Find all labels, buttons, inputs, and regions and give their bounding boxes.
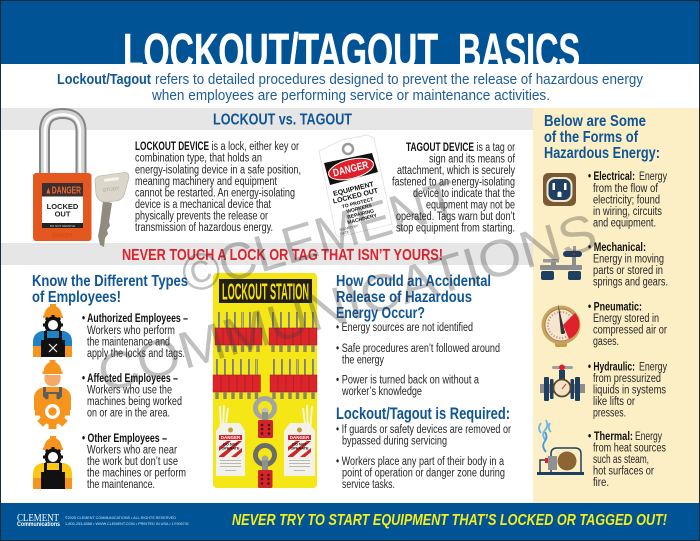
text: mechanical: parts or stored in	[593, 265, 663, 277]
text: mechanical: springs and gears.	[593, 276, 668, 288]
station sign	[219, 278, 312, 304]
list: when required: • If guards or safety devices are removed or	[336, 424, 511, 436]
white strip below title	[0, 64, 700, 69]
heading: how could an accidental release occur: How Could an Accidental	[336, 273, 491, 290]
illustration: lockout station board	[213, 273, 317, 488]
text: affected employees: Workers who use the	[87, 384, 172, 396]
text: electrical: from the flow of	[593, 183, 659, 195]
text: affected employees: • Affected Employees –	[82, 373, 178, 385]
list: when required: bypassed during servicing	[342, 436, 447, 448]
logo: clement communications	[17, 512, 61, 528]
text: LOCKOUT STATION	[222, 278, 309, 304]
text: authorized employees: the maintenance and	[87, 336, 170, 348]
text: affected employees: machines being worked	[87, 396, 182, 408]
text: other employees: the work but don’t use	[87, 456, 178, 468]
heading: how could an accidental release occur: Release of Hazardous	[336, 289, 472, 306]
footer band	[0, 503, 700, 540]
panel: lockout vs tagout heading band: LOCKOUT vs. TAGOUT	[213, 112, 352, 128]
padlock rows	[213, 312, 317, 399]
text: tagout device: operated. Tags warn but don’t	[396, 211, 516, 223]
icon: danger tag	[319, 135, 392, 237]
text: mechanical: • Mechanical:	[588, 242, 646, 254]
text: lockout device: energy-isolating device in a safe position,	[135, 164, 301, 176]
copyright: ©2025 CLEMENT COMMUNICATIONS • ALL RIGHTS RESERVED	[65, 516, 176, 520]
list: when required: service tasks.	[342, 479, 395, 491]
text: mechanical: Energy in moving	[593, 254, 664, 266]
heading: know the different types of employees: Know the Different Types	[32, 273, 188, 290]
text: authorized employees: apply the locks and tags.	[87, 348, 185, 360]
icon: danger tag: EQUIPMENT	[333, 181, 375, 198]
text: other employees: Workers who are near	[87, 444, 177, 456]
text: electrical: Energy	[639, 171, 667, 183]
icon: authorized employee	[33, 304, 72, 357]
text: lockout device: cannot be restarted. An energy-isolating	[135, 188, 295, 200]
copyright	[65, 516, 189, 526]
hasp one	[256, 398, 274, 438]
list: accidental release causes: worker’s knowledge	[341, 386, 422, 398]
text: hydraulic: Energy	[639, 362, 667, 374]
band: never touch warning: NEVER TOUCH A LOCK OR TAG THAT ISN’T YOURS!	[122, 247, 443, 264]
text: hydraulic: liquids in systems	[593, 384, 666, 396]
text: tagout device: attachment, which is securely	[397, 165, 515, 177]
text: pneumatic: compressed air or	[593, 324, 667, 336]
danger tag left: DO NOT	[223, 442, 239, 446]
text: thermal: such as steam,	[593, 454, 649, 466]
icon: danger tag: TO PROTECT	[341, 197, 374, 210]
text: thermal: from heat sources	[593, 442, 666, 454]
hasp two	[256, 446, 274, 488]
text: pneumatic	[588, 302, 667, 348]
text: lockout device: meaning machinery and equipment	[135, 176, 278, 188]
text: thermal: fire.	[593, 477, 609, 489]
text: affected employees: on or are in the area.	[87, 408, 170, 420]
danger tag left: DANGER	[221, 435, 241, 440]
header band	[0, 0, 700, 64]
panel: hazardous energy background	[533, 108, 699, 503]
title: LOCKOUT/TAGOUT	[123, 24, 438, 80]
text: affected employees	[82, 373, 182, 420]
text: tagout device: sign and its means of	[429, 154, 516, 166]
zip ties	[220, 405, 312, 432]
text: electrical: and equipment.	[593, 218, 656, 230]
heading: how could an accidental release occur: Energy Occur?	[336, 305, 425, 322]
text: authorized employees	[82, 313, 188, 360]
text: tagout device: fastened to an energy-isolating	[392, 176, 515, 188]
text: lockout device: physically prevents the release or	[135, 210, 268, 222]
text: mechanical	[588, 242, 668, 288]
text: tagout device: is a tag or	[476, 142, 515, 154]
intro text	[57, 71, 643, 104]
text: other employees: the machines or perform	[87, 468, 186, 480]
text: thermal	[588, 431, 666, 489]
danger tag left	[216, 423, 245, 476]
text: authorized employees: Workers who perform	[87, 325, 175, 337]
icon: danger tag: MACHINERY	[347, 213, 378, 226]
text: electrical: in wiring, circuits	[593, 206, 662, 218]
heading: how could an accidental release occur	[336, 273, 491, 322]
heading: forms of hazardous energy	[544, 113, 660, 162]
icon: orange padlock: DO NOT REMOVE	[50, 224, 75, 228]
heading: know the different types of employees	[32, 273, 188, 306]
text: hydraulic: presses.	[593, 408, 626, 420]
icon: thermal boiler	[537, 420, 584, 475]
copyright: 1-800-253-6368 • WWW.CLEMENT.COM • PRINTED IN USA • 1Y908741	[65, 522, 189, 526]
text: thermal: Energy	[635, 431, 662, 443]
text: pneumatic: Energy stored in	[593, 313, 659, 325]
text: electrical	[588, 171, 667, 230]
list: accidental release causes: • Safe procedures aren’t followed around	[336, 343, 500, 355]
text: electrical: electricity; found	[593, 194, 660, 206]
logo: clement communications: CLEMENT	[17, 512, 59, 524]
icon: pressure gauge	[542, 304, 580, 347]
danger tag right: DO NOT	[292, 442, 308, 446]
icon: danger tag: DATE	[340, 230, 350, 236]
band: never touch warning	[0, 243, 533, 265]
title: BASICS	[458, 24, 580, 80]
danger tag right	[284, 423, 315, 476]
danger tag left: OPERATE	[221, 446, 240, 450]
icon: danger tag: DANGER	[332, 159, 370, 179]
heading: forms of hazardous energy: Hazardous Energy:	[544, 145, 660, 162]
text: tagout device: equipment may not be	[426, 200, 515, 212]
icon: danger tag: WORKERS	[346, 203, 373, 215]
text: lockout device: transmission of hazardous energy.	[135, 222, 273, 234]
text: tagout device: stop equipment from starting.	[396, 222, 515, 234]
text: tagout device	[392, 142, 516, 234]
icon: affected employee	[34, 360, 71, 429]
text: lockout device: device is a mechanical device that	[135, 199, 272, 211]
text: hydraulic	[588, 362, 667, 420]
heading: forms of hazardous energy: of the Forms of	[544, 129, 639, 146]
text: authorized employees: • Authorized Employees –	[82, 313, 188, 325]
list: when required	[336, 424, 511, 491]
danger tag right: DANGER	[290, 435, 310, 440]
text: pneumatic: gases.	[593, 336, 619, 348]
panel: lockout vs tagout heading band	[0, 108, 533, 130]
icon: danger tag: SIGNED BY	[339, 224, 359, 232]
logo: clement communications: Communications	[17, 522, 61, 528]
text: other employees: the maintenance.	[87, 479, 155, 491]
icon: key: STUDY	[102, 186, 121, 194]
text: lockout device: LOCKOUT DEVICE	[135, 141, 209, 153]
text: hydraulic: from pressurized	[593, 373, 661, 385]
danger tag right: OPERATE	[290, 446, 309, 450]
icon: orange padlock: LOCKED	[47, 202, 79, 211]
icon: mechanical machinery	[540, 246, 582, 280]
list: accidental release causes: • Power is turned back on without a	[336, 374, 479, 386]
list: accidental release causes: • Energy sources are not identified	[336, 322, 473, 334]
icon: key	[95, 172, 129, 247]
text: pneumatic: • Pneumatic:	[588, 302, 642, 314]
text: thermal: hot surfaces or	[593, 466, 654, 478]
intro text: Lockout/Tagout	[57, 71, 151, 88]
list: when required: • Workers place any part of their body in a	[336, 456, 504, 468]
intro text: refers to detailed procedures designed to prevent the release of hazardous energy	[155, 71, 643, 88]
icon: orange padlock: OUT	[55, 210, 71, 218]
icon: hydraulic valve	[540, 364, 585, 401]
text: lockout device: is a lock, either key or	[212, 141, 299, 153]
list: accidental release causes: the energy	[342, 354, 384, 366]
text: hydraulic: • Hydraulic:	[588, 362, 635, 374]
icon: electrical outlet	[543, 173, 576, 206]
text: tagout device: device to indicate that the	[413, 188, 515, 200]
text: tagout device: TAGOUT DEVICE	[406, 142, 474, 154]
icon: orange padlock: ▲DANGER	[45, 186, 82, 196]
text: other employees: • Other Employees –	[82, 433, 167, 445]
list: accidental release causes	[336, 322, 500, 398]
heading: know the different types of employees: of Employees!	[32, 289, 121, 306]
heading: lockout/tagout is required: Lockout/Tagout is Required:	[336, 404, 510, 423]
text: hydraulic: like lifts or	[593, 396, 635, 408]
icon: orange padlock	[33, 114, 92, 241]
watermark: ©CLEMENT	[175, 169, 465, 306]
heading: forms of hazardous energy: Below are Some	[544, 113, 646, 130]
text: other employees	[82, 433, 186, 491]
icon: danger tag: REPAIRING	[347, 208, 375, 221]
watermark: COMMUNICATIONS	[91, 203, 603, 405]
icon: other employee	[33, 436, 72, 489]
text: electrical: • Electrical:	[588, 171, 635, 183]
text: lockout device: combination type, that holds an	[135, 152, 262, 164]
list: when required: point of operation or danger zone during	[342, 468, 505, 480]
intro text: when employees are performing service or maintenance activities.	[151, 87, 550, 104]
icon: orange padlock: BRADY	[52, 234, 73, 240]
text: thermal: • Thermal:	[588, 431, 633, 443]
text: lockout device	[135, 141, 301, 234]
icon: danger tag: LOCKED OUT	[332, 187, 380, 206]
